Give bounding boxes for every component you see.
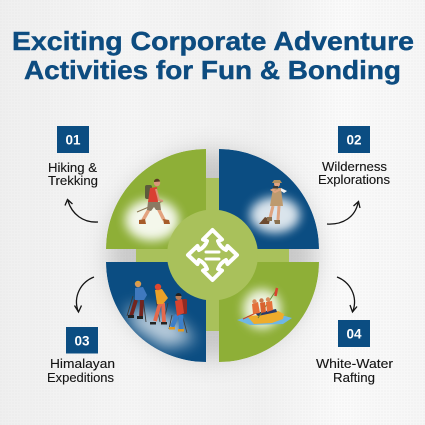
glow: hiking	[125, 199, 179, 241]
center circle with icon	[167, 210, 258, 300]
arrow 01	[65, 200, 98, 222]
label 02: Wilderness	[322, 159, 388, 174]
badge 04: 04	[346, 326, 362, 342]
icon: climbers	[127, 281, 187, 333]
badge 01: 01	[65, 132, 81, 148]
label 04	[316, 356, 394, 385]
icon: hiker	[137, 179, 170, 224]
label 02: Explorations	[318, 172, 390, 187]
label 03	[47, 356, 115, 385]
cross strips	[136, 178, 289, 331]
item 04	[316, 277, 394, 385]
panel: rafting quadrant	[219, 262, 319, 362]
badge 02: 02	[346, 132, 362, 148]
glow: rafting	[243, 289, 281, 329]
label 03: Expeditions	[47, 370, 114, 385]
item 03	[47, 277, 115, 385]
panel: hiking quadrant	[106, 149, 206, 249]
label 01	[48, 160, 98, 188]
title	[12, 26, 414, 85]
badge 03: 03	[74, 334, 90, 348]
arrow 03	[74, 277, 94, 312]
label 01: Hiking &	[48, 160, 97, 175]
label 01: Trekking	[48, 173, 98, 188]
arrow 02	[327, 202, 360, 224]
glow: wilderness	[250, 197, 300, 233]
climber one	[127, 281, 147, 322]
panel: wilderness quadrant	[219, 149, 319, 249]
item 01	[48, 126, 98, 222]
title: Activities for Fun & Bonding	[24, 55, 401, 85]
icon: explorer	[259, 180, 287, 224]
item 02	[318, 126, 390, 224]
climber three	[169, 293, 187, 333]
icon: four way arrows	[188, 230, 237, 280]
label 02	[318, 159, 390, 187]
arrow 04	[337, 277, 357, 312]
title: Exciting Corporate Adventure	[12, 26, 414, 56]
label 04: Rafting	[333, 370, 375, 385]
label 03: Himalayan	[50, 356, 115, 371]
climber two	[150, 284, 168, 324]
label 04: White-Water	[316, 356, 394, 371]
icon: raft	[237, 288, 292, 325]
panel: himalayan quadrant	[106, 262, 206, 362]
glow: himalayan	[126, 306, 196, 348]
